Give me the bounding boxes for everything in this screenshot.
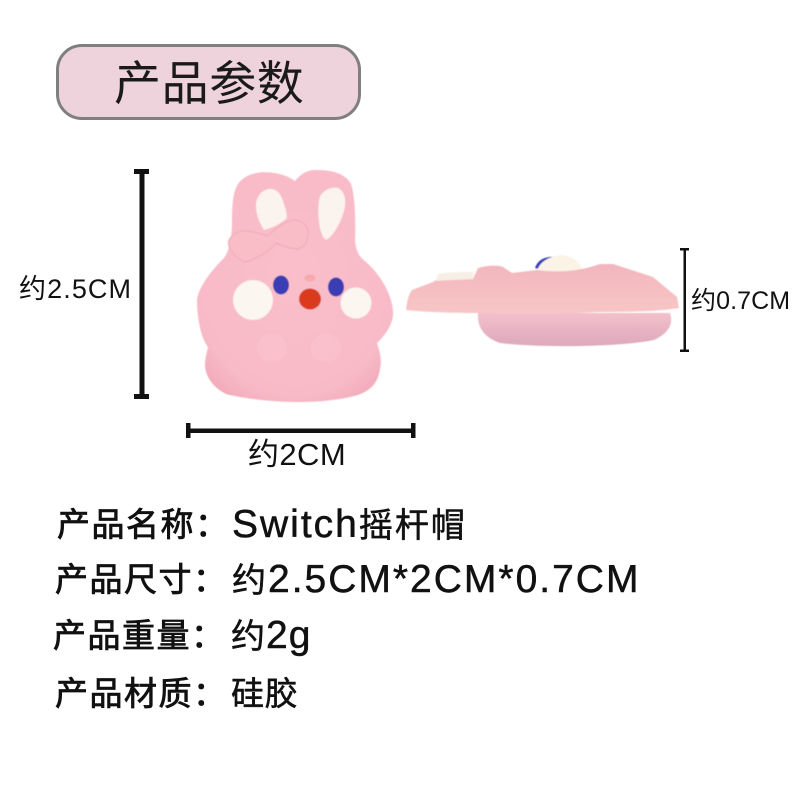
joystick cap side view — [406, 255, 679, 346]
white ear strip — [436, 272, 474, 281]
left cheek — [233, 280, 273, 320]
eye white — [537, 255, 582, 274]
spec: size: 约2.5CM*2CM*0.7CM — [232, 558, 640, 601]
feet highlights — [257, 334, 287, 362]
spec: weight — [53, 614, 311, 657]
spec: name — [57, 503, 467, 546]
height label: 约2.5CM — [19, 274, 132, 304]
thickness label: 约0.7CM — [691, 287, 790, 315]
width dimension marker — [186, 423, 416, 438]
height dimension marker — [134, 169, 149, 399]
top slab — [406, 264, 679, 314]
left ear — [256, 189, 287, 230]
rabbit body — [197, 170, 393, 402]
right ear — [318, 188, 345, 239]
spec: name: 产品名称： — [57, 506, 230, 543]
spec: material: 产品材质： — [55, 675, 228, 712]
right eye — [328, 278, 344, 296]
spec: name: Switch摇杆帽 — [232, 503, 467, 546]
left eye — [273, 276, 289, 294]
nose — [304, 274, 316, 282]
title text: 产品参数 — [114, 57, 304, 110]
spec: size — [55, 558, 640, 601]
width label: 约2CM — [248, 437, 346, 472]
lower cap — [478, 313, 671, 346]
spec: weight: 产品重量： — [53, 617, 226, 654]
thickness dimension marker — [680, 248, 689, 352]
eye blue edge — [535, 257, 556, 272]
title badge — [56, 44, 361, 120]
mouth — [299, 288, 321, 310]
rabbit joystick cap front view — [197, 170, 393, 402]
spec: weight: 约2g — [231, 614, 311, 657]
bow — [228, 220, 308, 262]
spec: material: 硅胶 — [231, 675, 298, 712]
spec: size: 产品尺寸： — [55, 561, 228, 598]
right cheek — [340, 288, 372, 318]
